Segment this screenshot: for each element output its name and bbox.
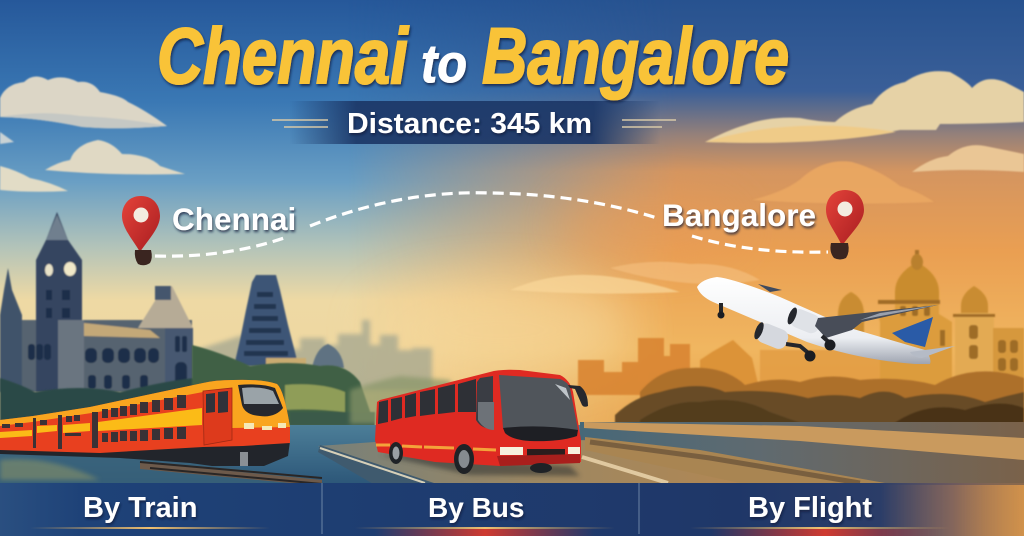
plane fuselage [697, 277, 930, 364]
plane landing gear [721, 303, 832, 356]
title [157, 11, 789, 100]
train lower windows [33, 412, 186, 449]
bus illustration [375, 370, 588, 476]
trees: right foreground [615, 368, 1024, 440]
bus windscreen [499, 375, 578, 430]
bus mirror [568, 385, 588, 407]
bus side windows [378, 379, 476, 424]
accent: bus [355, 527, 615, 536]
accent: flight [690, 527, 950, 536]
clouds: right [510, 71, 1024, 294]
river and road ground [0, 422, 1024, 485]
city label: Bangalore: Bangalore [662, 197, 816, 233]
railway track [140, 462, 322, 486]
pin: Chennai [122, 196, 160, 265]
label: by bus: By Bus [428, 492, 524, 523]
bus headlights and grille [500, 447, 580, 455]
train cab door [203, 388, 232, 445]
bus stripe [376, 445, 496, 450]
trees: left foreground [0, 345, 375, 440]
train windscreen [238, 384, 283, 416]
plane engines [785, 306, 823, 336]
label: by flight: By Flight [748, 492, 872, 524]
bus shadow [380, 455, 580, 476]
clouds: left [0, 76, 185, 192]
airplane illustration [697, 277, 955, 364]
plane tail stabiliser [910, 346, 955, 358]
bus wheels [389, 442, 403, 464]
bus door [476, 376, 493, 428]
title: Bangalore [482, 11, 789, 100]
accent: train [30, 527, 270, 529]
dividers [322, 483, 639, 534]
dashed route line [155, 193, 828, 256]
plane far wing edge [758, 284, 782, 292]
train illustration [0, 380, 290, 466]
train yellow roof and stripes [0, 380, 290, 428]
title: Chennai [157, 11, 410, 100]
plane tail fin [892, 317, 933, 347]
landmark: Chennai Central building [0, 212, 193, 392]
trees and road haze: centre [350, 376, 460, 424]
train lights [244, 423, 286, 430]
bus body [375, 370, 581, 466]
distant skyline: Bangalore side [578, 338, 700, 395]
landmark: Bangalore palace [700, 250, 1024, 400]
title: to [421, 34, 467, 94]
distant skyline: Chennai side [196, 320, 432, 390]
landmark: temple gopuram [234, 275, 344, 368]
train upper windows [2, 395, 186, 428]
train cab windows [206, 391, 228, 413]
city label: Chennai: Chennai [172, 201, 296, 237]
distance banner [272, 101, 676, 144]
train body [0, 380, 290, 453]
pin: Bangalore [826, 190, 864, 260]
bottom navigation bar [0, 483, 1024, 536]
distance text: Distance: 345 km [347, 108, 592, 140]
train undercarriage [0, 441, 290, 466]
label: by train: By Train [83, 492, 197, 524]
plane wing [815, 305, 938, 338]
